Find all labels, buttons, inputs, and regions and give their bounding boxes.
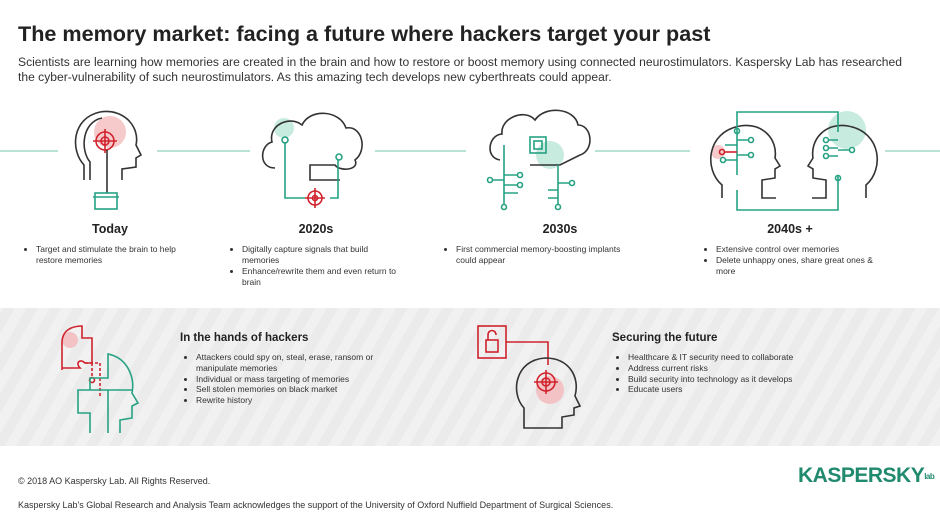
stage: 2040s+: Delete unhappy ones, share great ones & more (716, 255, 873, 276)
stage: 2020s: 2020s (299, 222, 333, 236)
icon: puzzle head (61, 325, 140, 433)
timeline arrows (0, 150, 940, 152)
stage: 2040s+: 2040s + (767, 222, 813, 236)
securing text block: Educate users (628, 384, 682, 394)
stage: 2040s+: Extensive control over memories (716, 244, 839, 254)
stage: 2030s (444, 222, 620, 265)
stage: Today: Target and stimulate the brain to help restore memories (36, 244, 176, 265)
hackers text block: Sell stolen memories on black market (196, 384, 337, 394)
hackers text block: In the hands of hackers (180, 332, 308, 344)
icon: lock and head (477, 325, 582, 429)
intro text: Scientists are learning how memories are created in the brain and how to restore or boost memory using connected neurostimulators. Kaspersky Lab has researched (18, 55, 902, 69)
stage: 2020s: Digitally capture signals that build memories (242, 244, 368, 265)
stage: 2030s: 2030s (543, 222, 577, 236)
intro text (18, 55, 902, 84)
securing text block: Build security into technology as it develops (628, 374, 792, 384)
logo: KASPERSKYlab (798, 464, 934, 487)
gray band panel (0, 308, 940, 446)
hackers text block: Attackers could spy on, steal, erase, ransom or manipulate memories (196, 352, 373, 373)
stage: 2040s+ (704, 222, 873, 276)
hackers text block: Individual or mass targeting of memories (196, 374, 349, 384)
stage: 2020s: Enhance/rewrite them and even return to brain (242, 266, 396, 287)
stage: Today (24, 222, 176, 265)
hackers text block: Rewrite history (196, 395, 252, 405)
stage: 2030s: First commercial memory-boosting implants could appear (456, 244, 620, 265)
icon: two heads exchanging memories (711, 111, 877, 210)
securing text block: Address current risks (628, 363, 708, 373)
copyright: © 2018 AO Kaspersky Lab. All Rights Reserved. (18, 476, 210, 486)
icon: head with target (76, 111, 141, 209)
securing text block: Securing the future (612, 332, 717, 344)
acknowledgement: Kaspersky Lab's Global Research and Analysis Team acknowledges the support of the University of Oxford Nuffield Department of Surgical Sciences. (18, 500, 613, 510)
stage: 2020s (230, 222, 396, 287)
title: The memory market: facing a future where hackers target your past (18, 21, 710, 46)
intro text: the cyber-vulnerability of such neurostimulators. As this amazing tech develops new cyberthreats could appear. (18, 70, 612, 84)
stage: Today: Today (92, 222, 128, 236)
timeline illustrations (0, 110, 940, 211)
icon: cloud brain 2020s (263, 113, 362, 208)
securing text block: Healthcare & IT security need to collaborate (628, 352, 793, 362)
hackers text block (180, 332, 374, 405)
securing text block (612, 332, 793, 394)
icon: cloud with chip 2030s (488, 110, 590, 210)
